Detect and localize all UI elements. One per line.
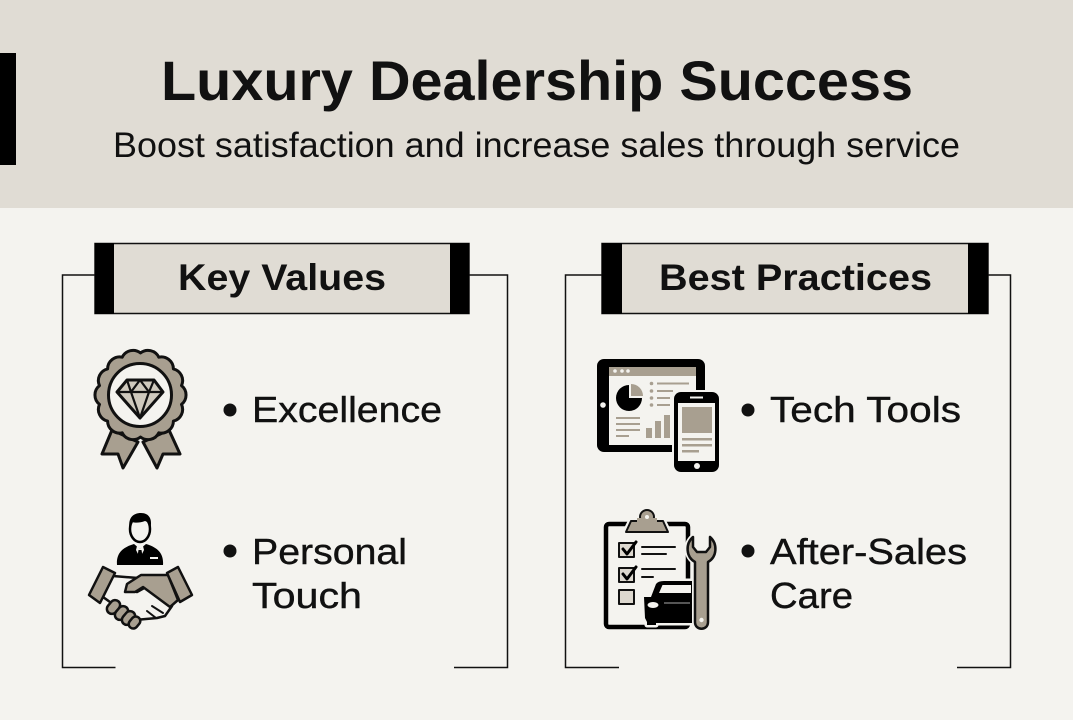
icon: rosette with diamond	[95, 350, 186, 468]
heading: best practices	[602, 243, 988, 314]
list item: tech tools: Tech Tools	[770, 389, 961, 430]
heading: best practices: Best Practices	[659, 257, 932, 298]
panel: best practices	[566, 243, 1010, 668]
list item: excellence: Excellence	[252, 389, 442, 430]
accent bar	[0, 53, 16, 165]
icon: advisor and handshake	[89, 513, 192, 630]
list item: after-sales care: Care	[770, 575, 853, 616]
list item: after-sales care: After-Sales	[770, 531, 967, 572]
list item: after-sales care	[742, 531, 967, 616]
icon: tablet and phone	[597, 359, 721, 474]
title: Luxury Dealership Success	[161, 49, 913, 112]
heading: key values: Key Values	[178, 257, 386, 298]
list item: personal touch: Touch	[252, 575, 362, 616]
icon: checklist, car and wrench	[606, 510, 715, 629]
list item: personal touch	[224, 531, 407, 616]
subtitle: Boost satisfaction and increase sales through service	[113, 126, 960, 165]
list item: personal touch: Personal	[252, 531, 407, 572]
panel: header banner	[0, 0, 1073, 208]
panel: key values	[62, 243, 508, 668]
heading: key values	[95, 243, 469, 314]
